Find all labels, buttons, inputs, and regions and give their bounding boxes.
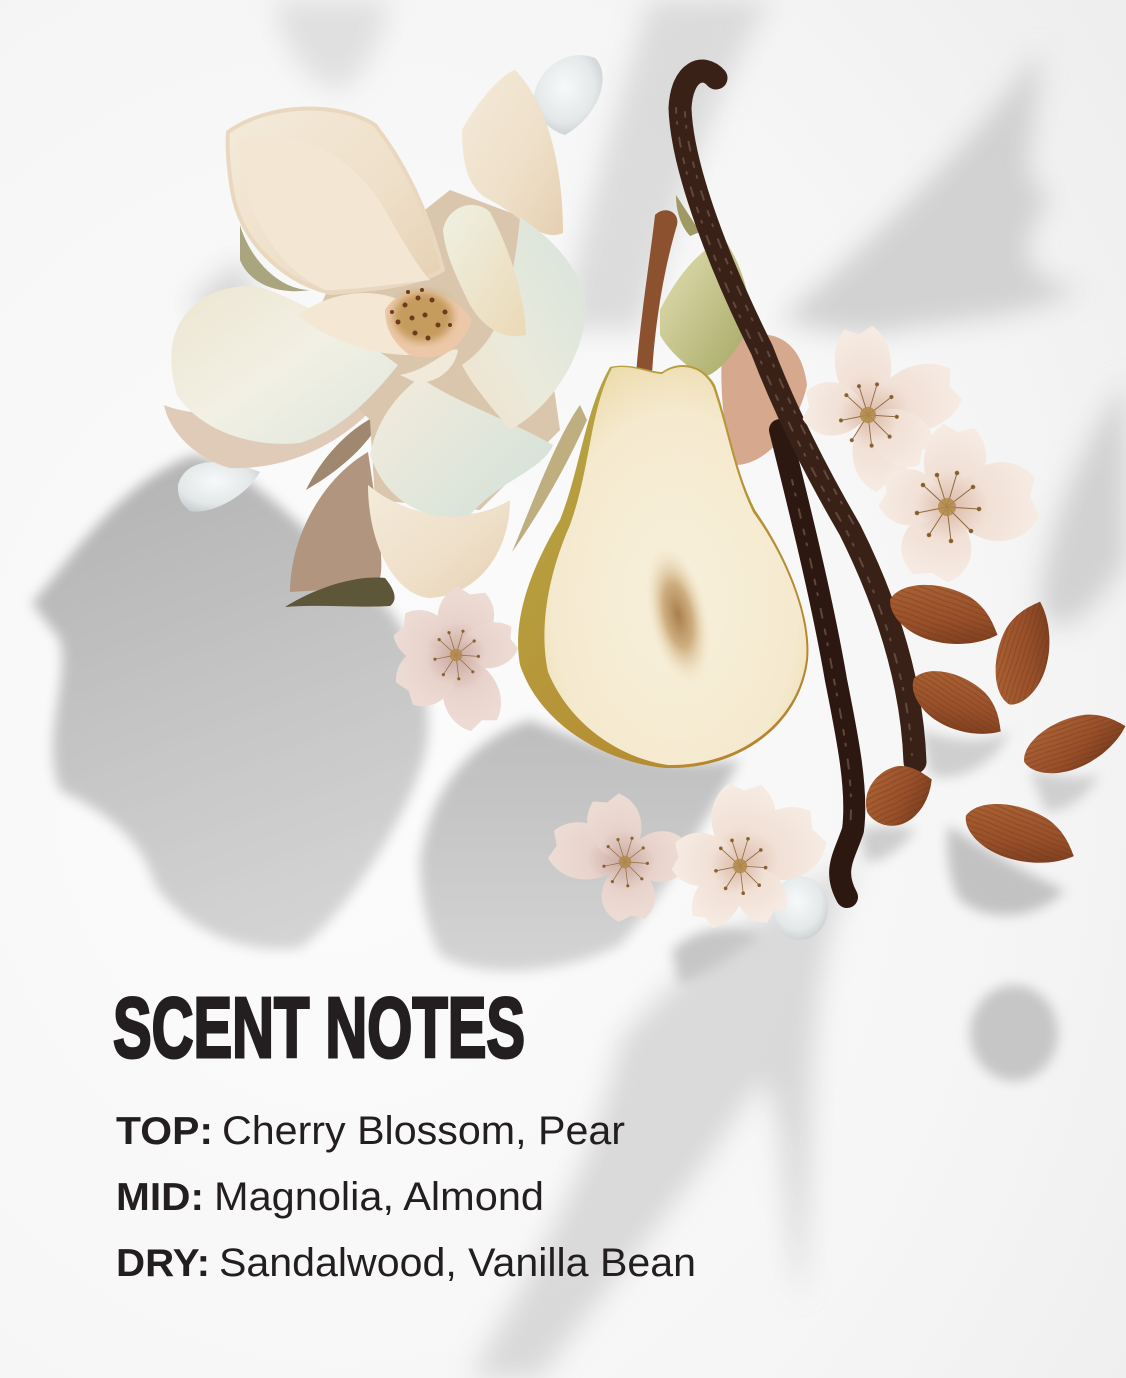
magnolia bud (443, 205, 526, 336)
inner cream petal (298, 293, 410, 355)
right petal (462, 217, 586, 430)
scent notes list (116, 1109, 696, 1285)
mid notes: Magnolia, Almond (214, 1175, 544, 1219)
pear core (634, 538, 722, 692)
top notes: Cherry Blossom, Pear (222, 1109, 625, 1153)
magnolia center (385, 291, 472, 358)
top right petal (462, 70, 563, 235)
title: SCENT NOTES (113, 981, 525, 1076)
mid notes: MID: (116, 1176, 204, 1219)
water droplets (178, 55, 828, 940)
magnolia flower (164, 70, 586, 607)
vanilla beans (676, 71, 915, 897)
upper left petal (228, 109, 443, 293)
bottom centre petal (370, 377, 553, 517)
stem and leaf beside pear (512, 195, 807, 552)
blossom: below magnolia (387, 582, 522, 737)
dry notes: DRY: (116, 1242, 210, 1285)
blossom: bottom left (544, 790, 690, 923)
brown back leaves (164, 225, 395, 607)
blossom: upper right (799, 324, 968, 496)
left petal (171, 286, 398, 444)
cherry blossoms (387, 324, 1041, 935)
lower petal (368, 485, 510, 598)
almonds (854, 570, 1126, 881)
blossom: lower right (874, 420, 1041, 587)
magnolia base filling gaps between petals (300, 190, 560, 510)
pear half (518, 210, 808, 768)
top notes: TOP: (116, 1110, 213, 1153)
dry notes: Sandalwood, Vanilla Bean (219, 1241, 696, 1285)
blossom: bottom right (668, 781, 835, 935)
